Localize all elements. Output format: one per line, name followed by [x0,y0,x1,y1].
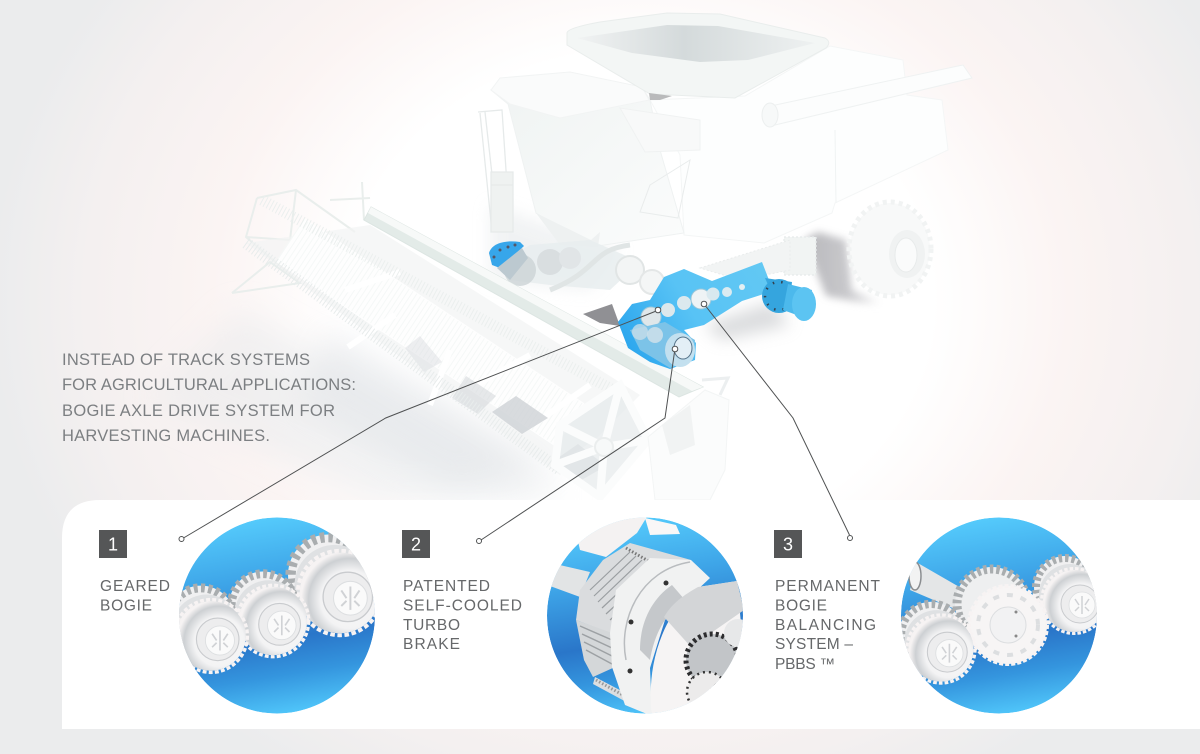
feature 3 label: SYSTEM – [775,636,853,653]
feature 2 number: 2 [411,534,421,554]
feature 1 number [99,530,127,558]
ghost drive under machine [495,240,790,294]
main beam [364,207,703,397]
shadow slats [405,336,606,482]
big white disc [650,581,742,713]
feature 2 label: TURBO [403,617,460,634]
brake body [610,558,710,716]
leader line 1 [179,307,661,542]
feature 3 label [775,578,881,673]
comb: rear guard [262,200,628,398]
reel spokes [345,272,625,455]
white gear chunk [578,518,646,557]
feature 2 label: PATENTED [403,578,490,595]
hub drive end [762,278,816,321]
centre gear [955,567,1047,664]
text: introduction [62,351,356,445]
feature 1 label [100,578,170,614]
feature 3 number: 3 [783,534,793,554]
feature 3 label: BALANCING [775,617,876,634]
axle housing [618,262,776,369]
cooling fins lower [576,620,624,700]
bogie gear wheels [641,284,745,327]
feature 2 number [402,530,430,558]
cooling fins upper [576,543,691,633]
shaft [550,563,590,597]
feature 3 label: PBBS ™ [775,656,835,673]
comb: front guard [246,243,560,470]
feature 3 number [774,530,802,558]
blue bogie axle [618,262,816,369]
feature 2 label: SELF-COOLED [403,598,522,614]
ground shadows [150,205,884,500]
grain hopper [567,13,829,100]
feature 1 number: 1 [108,534,118,554]
circle image 1: geared bogie [166,518,382,714]
planetary gear [684,619,743,702]
panel: features [62,500,1200,729]
circle image 2: turbo brake [547,515,752,720]
brake assembly [630,322,695,368]
chassis and ladder [478,110,816,275]
text: introduction: FOR AGRICULTURAL APPLICATIONS: [62,376,356,394]
text: introduction: BOGIE AXLE DRIVE SYSTEM FOR [62,402,335,420]
leader line 3 [701,301,852,540]
header floor tint [246,225,640,475]
cab [491,72,700,247]
main body [650,46,948,243]
unloading auger [762,65,972,127]
reel [290,240,570,425]
leader line 2 [476,346,678,544]
reel hexagon wheel [555,385,648,497]
feature 2 label [403,578,522,653]
harvester machine [478,13,972,296]
icon: small blue drive on far side [489,241,528,280]
feature 3 label: PERMANENT [775,578,881,595]
feature 3 label: BOGIE [775,598,827,614]
feature 1 label: BOGIE [100,598,152,614]
reel end frame [232,182,370,293]
text: introduction: INSTEAD OF TRACK SYSTEMS [62,351,310,369]
feature 1 label: GEARED [100,578,170,595]
feature 2 label: BRAKE [403,636,460,653]
text: introduction: HARVESTING MACHINES. [62,427,270,445]
rear tyre [849,202,931,296]
header cutter bar [232,182,729,500]
shaft [910,563,958,608]
circle image 3: balancing system [899,518,1106,714]
right end panel [648,378,729,500]
